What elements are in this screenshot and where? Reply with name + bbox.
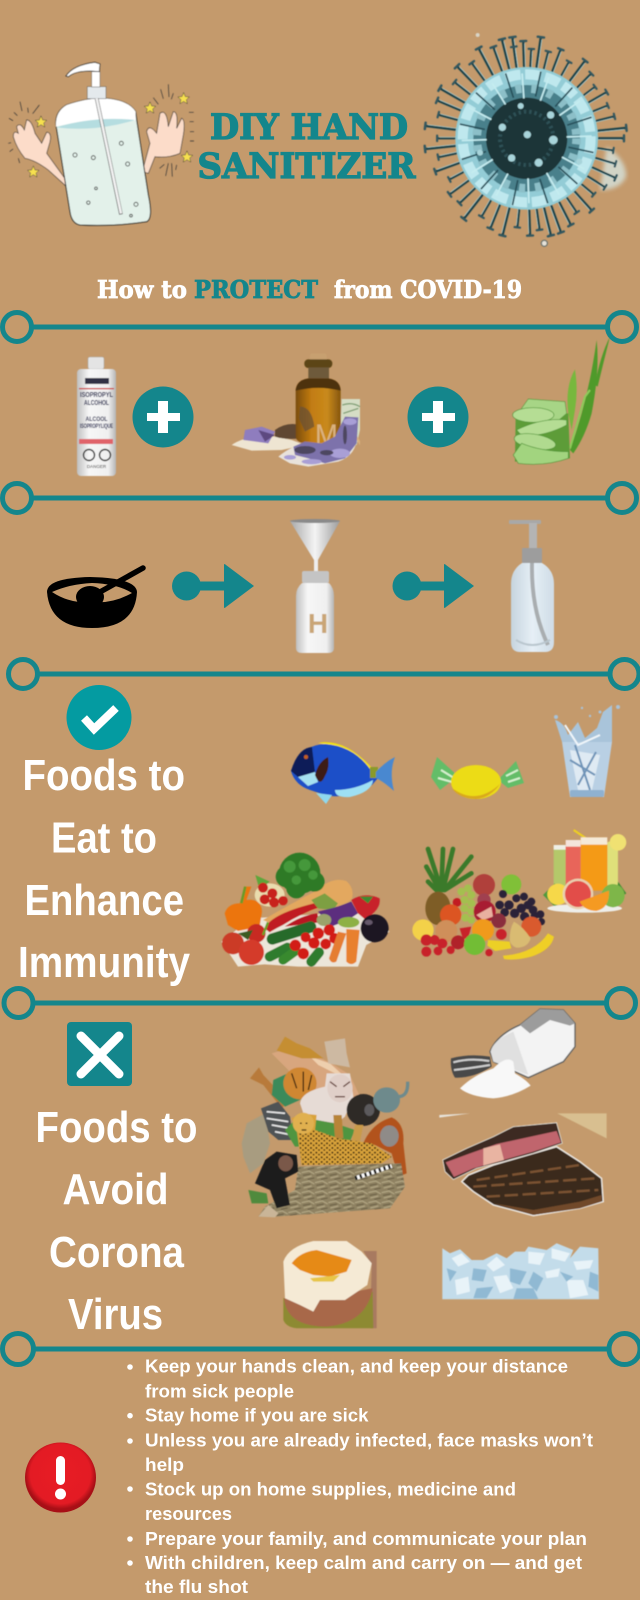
list: protection tips: Keep your hands clean, and keep your distance <box>145 1357 568 1377</box>
illustration: wild animals <box>242 1037 408 1217</box>
list: protection tips <box>127 1357 593 1597</box>
arrow: funnel to dispenser <box>392 564 474 608</box>
icon: plus <box>132 386 194 448</box>
icon: glass of water <box>554 705 620 797</box>
icon: isopropyl alcohol bottle <box>77 357 116 476</box>
list: protection tips: With children, keep calm and carry on — and get <box>145 1553 582 1573</box>
heading: foods to avoid: Avoid <box>62 1165 168 1214</box>
icon: essential oil and lavender <box>232 337 610 467</box>
list: protection tips: Stock up on home supplies, medicine and <box>145 1480 516 1500</box>
title: DIY Hand Sanitizer: DIY HAND <box>210 107 408 148</box>
icon: essential oil and lavender: MIN <box>315 419 365 452</box>
icon: candy <box>431 757 524 799</box>
list: protection tips: Unless you are already infected, face masks won’t <box>145 1431 593 1451</box>
icon: steak <box>439 1113 607 1216</box>
icon: ice cubes <box>442 1243 599 1299</box>
icon: juices and citrus <box>543 830 626 913</box>
icon: pump dispenser bottle <box>509 520 554 652</box>
icon: check mark <box>66 685 132 750</box>
icon: sanitizer bottle with clapping hands <box>8 62 194 225</box>
illustration: coronavirus <box>425 33 627 246</box>
list: protection tips: resources <box>145 1504 232 1524</box>
heading: How to protect from COVID-19 <box>97 275 522 304</box>
list: protection tips: from sick people <box>145 1382 294 1402</box>
divider 2 <box>2 484 636 512</box>
icon: isopropyl alcohol bottle: ISOPROPYLIQUE <box>80 424 113 430</box>
list: protection tips: Prepare your family, and communicate your plan <box>145 1529 587 1549</box>
icon: isopropyl alcohol bottle: DANGER <box>87 464 107 469</box>
icon: mixing bowl with spoon <box>47 568 143 628</box>
heading: foods to avoid: Foods to <box>36 1103 198 1152</box>
icon: isopropyl alcohol bottle: ALCOOL <box>86 416 108 423</box>
list: protection tips: Stay home if you are sick <box>145 1406 370 1426</box>
list: protection tips: the flu shot <box>145 1577 248 1597</box>
icon: isopropyl alcohol bottle: ISOPROPYL <box>80 392 114 399</box>
heading: foods to eat: Foods to <box>22 751 185 800</box>
icon: cross <box>67 1022 132 1086</box>
icon: funnel and bottle <box>290 519 340 653</box>
bullet markers <box>127 1364 133 1566</box>
title: DIY Hand Sanitizer <box>198 107 416 187</box>
heading: foods to avoid: Corona <box>49 1228 184 1277</box>
heading: How to protect from COVID-19: How to <box>97 275 187 304</box>
icon: warning <box>25 1442 96 1512</box>
icon: vegetables <box>221 853 390 967</box>
icon: isopropyl alcohol bottle: ALCOHOL <box>84 398 109 407</box>
icon: plus <box>408 386 468 448</box>
heading: How to protect from COVID-19: PROTECT <box>194 275 318 304</box>
divider 1 <box>2 312 636 342</box>
title: DIY Hand Sanitizer: SANITIZER <box>198 146 416 187</box>
icon: blue fish <box>291 742 395 804</box>
heading: foods to avoid: Virus <box>68 1290 163 1339</box>
heading: foods to avoid <box>36 1103 198 1339</box>
heading: foods to eat: Enhance <box>24 876 184 925</box>
icon: fruits <box>412 849 554 960</box>
arrow: mix to funnel <box>172 564 254 608</box>
divider 4 <box>4 988 636 1018</box>
divider 3 <box>8 660 639 688</box>
list: protection tips: help <box>145 1455 184 1475</box>
heading: How to protect from COVID-19: from COVID-19 <box>334 275 522 304</box>
icon: soft boiled egg <box>283 1241 377 1328</box>
icon: salt shaker <box>451 1009 575 1098</box>
heading: foods to eat <box>18 751 190 987</box>
heading: foods to eat: Eat to <box>51 814 157 862</box>
heading: foods to eat: Immunity <box>18 938 190 987</box>
icon: funnel and bottle: H <box>308 608 328 639</box>
divider 5 <box>2 1334 640 1364</box>
